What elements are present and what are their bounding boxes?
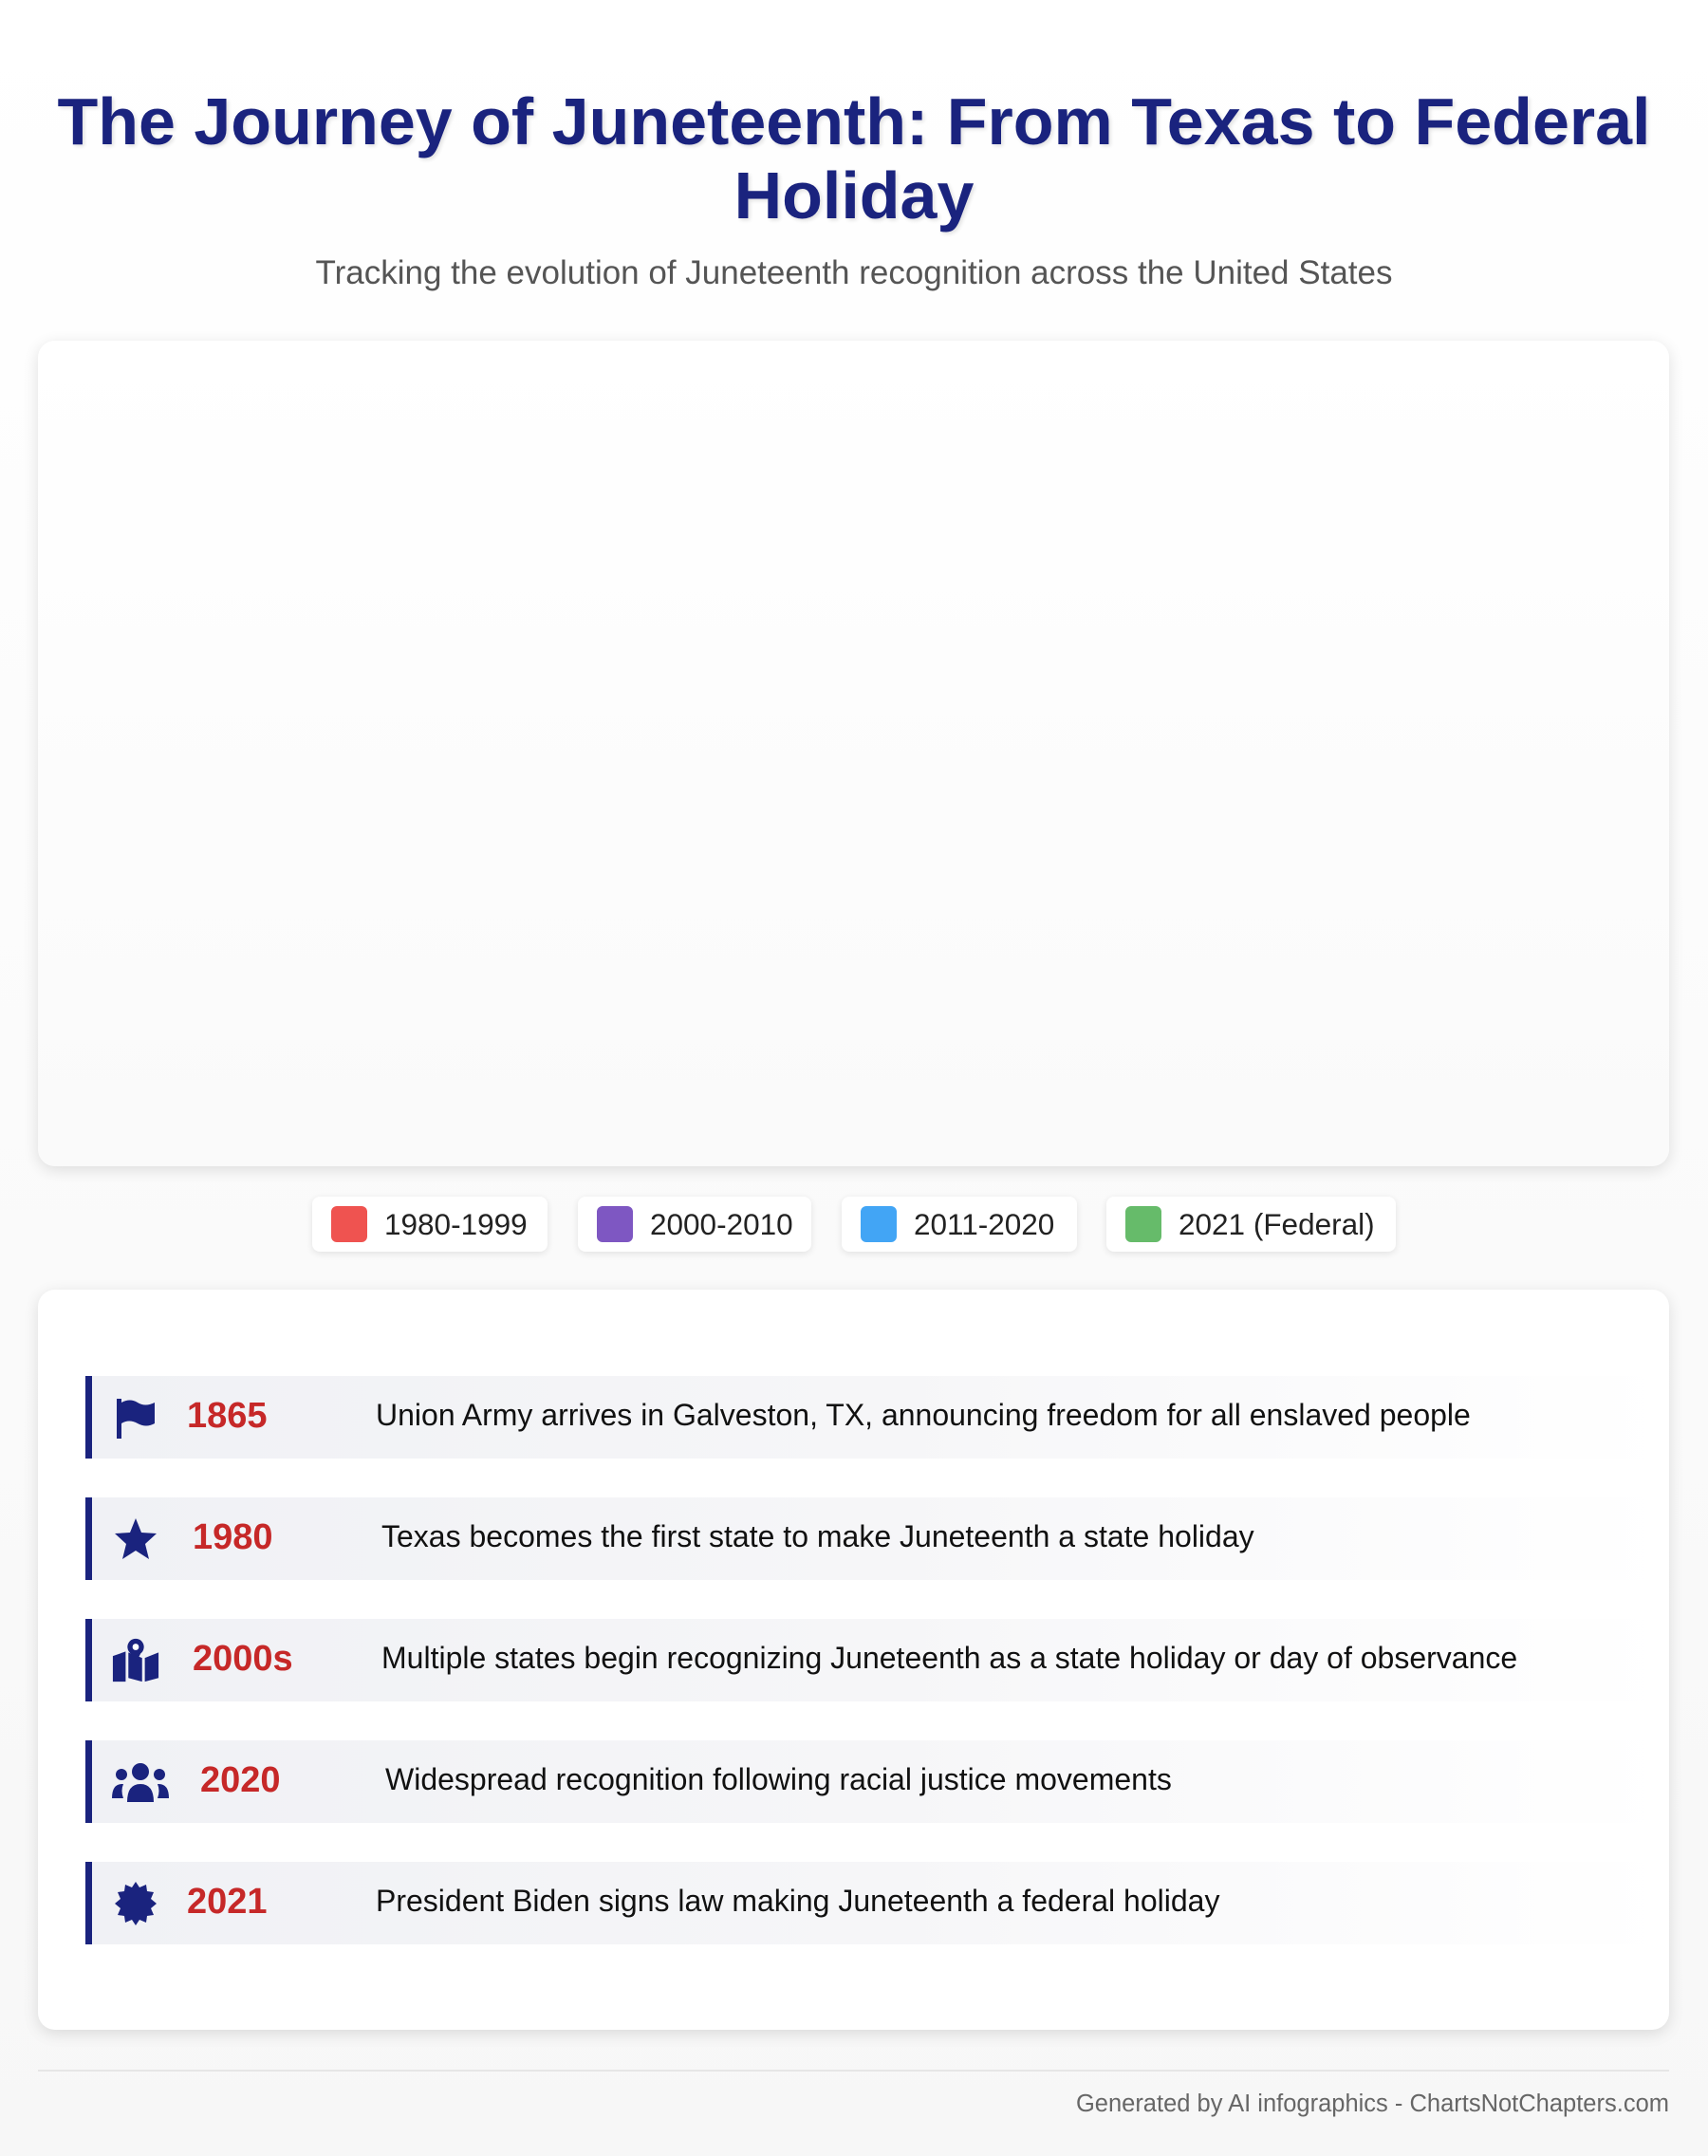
legend item 2000-2010: 2000-2010 bbox=[650, 1207, 793, 1241]
icon: people bbox=[112, 1763, 169, 1802]
timeline item 1980 bbox=[85, 1497, 1667, 1580]
legend item 2021: 2021 (Federal) bbox=[1179, 1207, 1375, 1241]
timeline item 1865 bbox=[85, 1376, 1667, 1459]
title bbox=[57, 84, 1651, 235]
timeline item 2021: President Biden signs law making Juneteenth a federal holiday bbox=[376, 1884, 1219, 1918]
panel: timeline bbox=[38, 1290, 1669, 2030]
timeline item 2000s: Multiple states begin recognizing Juneteenth as a state holiday or day of observance bbox=[381, 1641, 1517, 1675]
footer: Generated by AI infographics - ChartsNotChapters.com bbox=[1076, 2091, 1669, 2117]
timeline item 2000s bbox=[85, 1619, 1667, 1701]
timeline item 2021: 2021 bbox=[187, 1882, 268, 1922]
panel: map bbox=[38, 341, 1669, 1166]
timeline item 1865: Union Army arrives in Galveston, TX, announcing freedom for all enslaved people bbox=[376, 1398, 1471, 1432]
icon: star bbox=[115, 1518, 157, 1559]
legend bbox=[311, 1203, 1397, 1255]
subtitle: Tracking the evolution of Juneteenth recognition across the United States bbox=[316, 254, 1392, 291]
timeline item 1980: 1980 bbox=[193, 1517, 273, 1557]
timeline item 2020 bbox=[85, 1740, 1667, 1823]
timeline item 2000s: 2000s bbox=[193, 1639, 293, 1679]
legend item 2021 bbox=[1106, 1197, 1396, 1252]
legend item 1980-1999: 1980-1999 bbox=[384, 1207, 528, 1241]
title: Holiday bbox=[734, 158, 974, 232]
icon: flag bbox=[117, 1399, 155, 1439]
timeline item 2021 bbox=[85, 1862, 1667, 1944]
title: The Journey of Juneteenth: From Texas to Federal bbox=[57, 84, 1651, 158]
icon: map bbox=[112, 1638, 159, 1682]
timeline item 2020: 2020 bbox=[200, 1760, 281, 1800]
legend item 2000-2010 bbox=[578, 1197, 811, 1252]
legend item 2011-2020: 2011-2020 bbox=[914, 1207, 1054, 1241]
timeline item 2020: Widespread recognition following racial justice movements bbox=[385, 1762, 1172, 1796]
legend item 1980-1999 bbox=[312, 1197, 548, 1252]
timeline item 1865: 1865 bbox=[187, 1396, 268, 1436]
legend item 2011-2020 bbox=[842, 1197, 1077, 1252]
icon: seal bbox=[115, 1882, 157, 1925]
timeline item 1980: Texas becomes the first state to make Juneteenth a state holiday bbox=[381, 1519, 1254, 1553]
